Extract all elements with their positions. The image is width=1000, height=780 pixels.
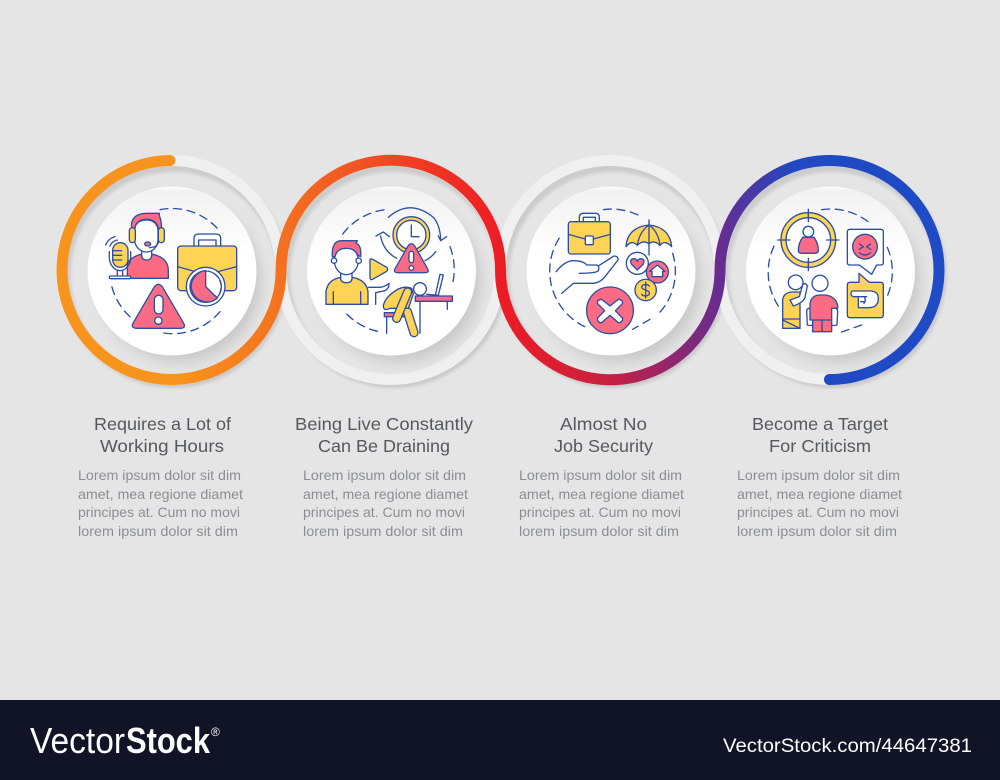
- body text: step 2: Lorem ipsum dolor sit dim: [303, 467, 466, 483]
- ring base 4: [718, 160, 946, 388]
- panel: step 2 live constantly: [280, 160, 508, 539]
- icon: headset host, briefcase clock and warning: [106, 208, 237, 334]
- panel: step 3 job security: [499, 160, 727, 539]
- body text: step 1: Lorem ipsum dolor sit dim: [78, 467, 241, 483]
- footer logo: Vector: [30, 720, 125, 761]
- body text: step 1: principes at. Cum no movi: [78, 504, 240, 520]
- body text: step 4: Lorem ipsum dolor sit dim: [737, 467, 900, 483]
- panel: step 1 working hours: [60, 160, 288, 539]
- heading: step 4: For Criticism: [769, 436, 871, 456]
- icon: target, speech bubbles and pointing people: [768, 209, 892, 332]
- heading: step 3: Job Security: [554, 436, 653, 456]
- heading: step 3: Almost No: [560, 414, 647, 434]
- body text: step 1: lorem ipsum dolor sit dim: [78, 523, 238, 539]
- body text: step 3: lorem ipsum dolor sit dim: [519, 523, 679, 539]
- heading: step 2: Being Live Constantly: [295, 414, 473, 434]
- footer bar: [0, 700, 1000, 780]
- body text: step 2: lorem ipsum dolor sit dim: [303, 523, 463, 539]
- ring base 2: [280, 160, 508, 388]
- body text: step 3: Lorem ipsum dolor sit dim: [519, 467, 682, 483]
- footer logo: ®: [211, 725, 220, 739]
- heading: step 1: Working Hours: [100, 436, 224, 456]
- ring base 1: [60, 160, 288, 388]
- body text: step 2: amet, mea regione diamet: [303, 486, 468, 502]
- footer logo: Stock: [126, 720, 211, 761]
- icon: presenter, clock warning and exhausted worker: [326, 208, 454, 333]
- icon: briefcase, hand, umbrella and cross: [550, 209, 675, 334]
- body text: step 4: amet, mea regione diamet: [737, 486, 902, 502]
- body text: step 2: principes at. Cum no movi: [303, 504, 465, 520]
- gradient ribbon connecting the four rings: [62, 160, 939, 380]
- heading: step 1: Requires a Lot of: [94, 414, 231, 434]
- footer image id: VectorStock.com/44647381: [723, 735, 972, 757]
- body text: step 3: principes at. Cum no movi: [519, 504, 681, 520]
- body text: step 3: amet, mea regione diamet: [519, 486, 684, 502]
- body text: step 1: amet, mea regione diamet: [78, 486, 243, 502]
- body text: step 4: lorem ipsum dolor sit dim: [737, 523, 897, 539]
- heading: step 2: Can Be Draining: [318, 436, 450, 456]
- ring base 3: [499, 160, 727, 388]
- heading: step 4: Become a Target: [752, 414, 888, 434]
- panel: step 4 target for criticism: [718, 160, 946, 539]
- body text: step 4: principes at. Cum no movi: [737, 504, 899, 520]
